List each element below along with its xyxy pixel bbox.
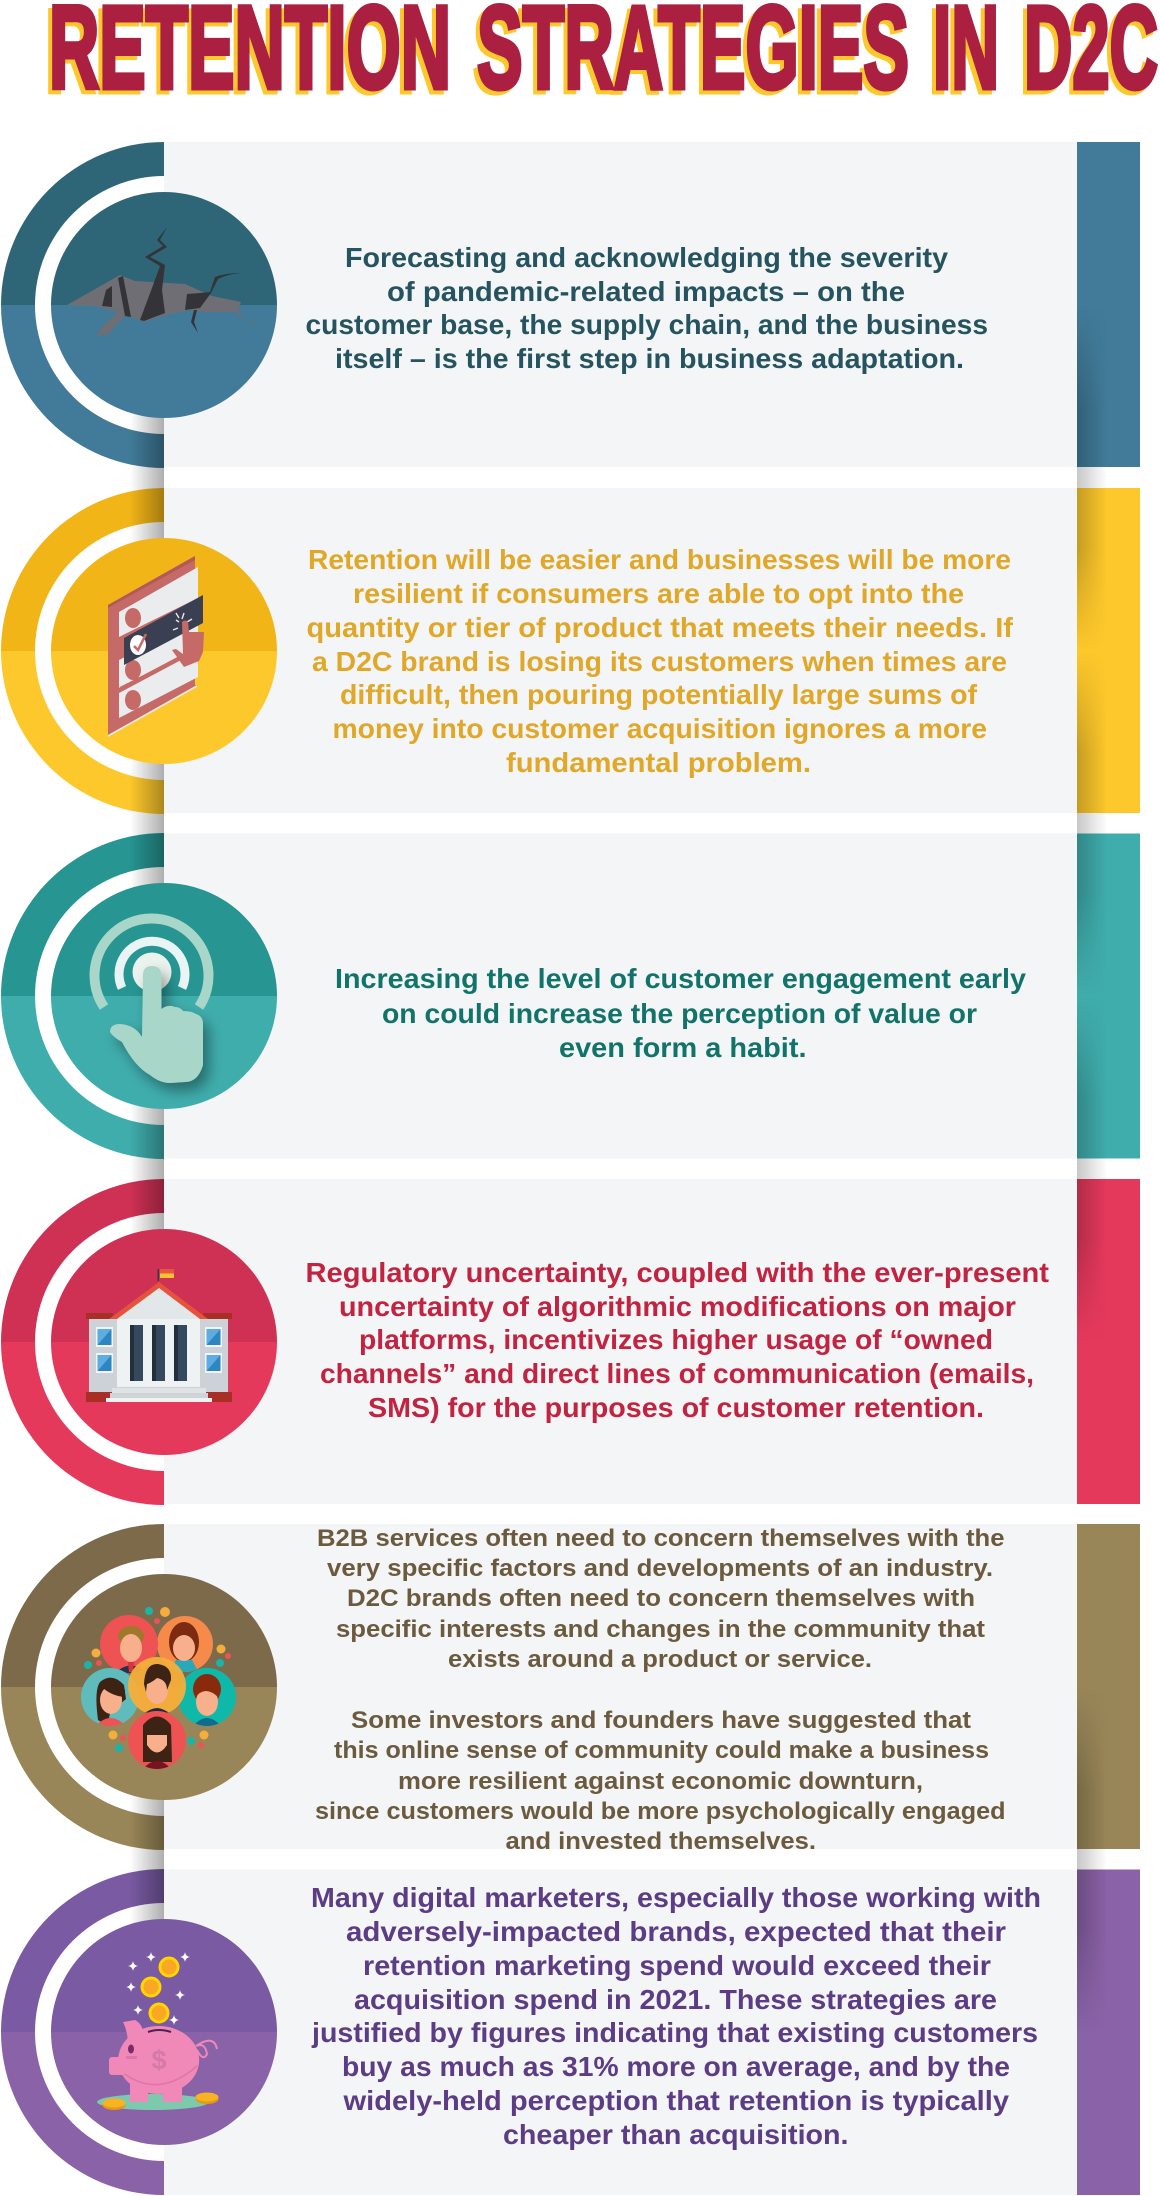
text: community: this online sense of community could make a business xyxy=(334,1737,989,1764)
text: product tiers xyxy=(306,544,1014,778)
text: community: specific interests and changes in the community that xyxy=(336,1616,985,1643)
panel: community xyxy=(1,1524,1140,1859)
text: forecasting: itself – is the first step in business adaptation. xyxy=(335,343,964,374)
text: forecasting xyxy=(306,242,988,374)
text: regulation xyxy=(306,1257,1049,1423)
text: community: Some investors and founders have suggested that xyxy=(351,1707,971,1734)
icon: piggy bank with coins: $ xyxy=(151,2045,167,2075)
panel: engagement xyxy=(1,823,1140,1169)
text: retention spend: adversely-impacted brands, expected that their xyxy=(346,1916,1006,1947)
text: retention spend: Many digital marketers, especially those working with xyxy=(311,1882,1041,1913)
icon: community avatars xyxy=(81,1607,236,1770)
text: engagement: Increasing the level of customer engagement early xyxy=(335,963,1027,994)
text: retention spend xyxy=(311,1882,1041,2150)
panel: forecasting xyxy=(1,142,1140,478)
text: product tiers: fundamental problem. xyxy=(506,747,811,778)
text: regulation: SMS) for the purposes of customer retention. xyxy=(368,1392,984,1423)
panel: product tiers xyxy=(1,478,1140,823)
text: community: more resilient against economic downturn, xyxy=(398,1768,923,1795)
text: retention spend: acquisition spend in 2021. These strategies are xyxy=(354,1984,997,2015)
text: engagement xyxy=(335,963,1027,1063)
text: retention spend: buy as much as 31% more on average, and by the xyxy=(342,2051,1010,2082)
text: product tiers: a D2C brand is losing its customers when times are xyxy=(312,646,1007,677)
text: regulation: uncertainty of algorithmic modifications on major xyxy=(339,1291,1016,1322)
text: community: very specific factors and developments of an industry. xyxy=(327,1555,993,1582)
text: retention spend: justified by figures indicating that existing customers xyxy=(311,2017,1038,2048)
title xyxy=(45,0,1158,118)
icon: piggy bank with coins xyxy=(97,1952,218,2110)
text: retention spend: widely-held perception that retention is typically xyxy=(342,2085,1010,2116)
text: forecasting: of pandemic-related impacts – on the xyxy=(387,276,905,307)
text: community: D2C brands often need to concern themselves with xyxy=(347,1585,975,1612)
text: engagement: even form a habit. xyxy=(559,1032,806,1063)
text: retention spend: retention marketing spend would exceed their xyxy=(363,1950,991,1981)
icon: cracked ground xyxy=(67,227,263,337)
text: forecasting: Forecasting and acknowledging the severity xyxy=(345,242,949,273)
text: product tiers: quantity or tier of product that meets their needs. If xyxy=(306,612,1014,643)
text: product tiers: resilient if consumers are able to opt into the xyxy=(353,578,964,609)
icon: institution building xyxy=(86,1269,232,1402)
text: regulation: channels” and direct lines of communication (emails, xyxy=(320,1358,1034,1389)
text: community: and invested themselves. xyxy=(506,1828,816,1855)
icon: checklist with pointing hand xyxy=(108,556,204,737)
text: product tiers: Retention will be easier and businesses will be more xyxy=(308,544,1011,575)
text: product tiers: difficult, then pouring potentially large sums of xyxy=(340,679,978,710)
text: engagement: on could increase the perception of value or xyxy=(382,998,977,1029)
text: community xyxy=(315,1525,1006,1855)
panel: regulation xyxy=(1,1169,1140,1505)
text: regulation: Regulatory uncertainty, coupled with the ever-present xyxy=(306,1257,1049,1288)
text: community: since customers would be more psychologically engaged xyxy=(315,1798,1006,1825)
text: product tiers: money into customer acquisition ignores a more xyxy=(332,713,987,744)
text: community: exists around a product or service. xyxy=(448,1646,872,1673)
text: retention spend: cheaper than acquisition. xyxy=(503,2119,848,2150)
text: regulation: platforms, incentivizes higher usage of “owned xyxy=(359,1324,993,1355)
text: community: B2B services often need to concern themselves with the xyxy=(317,1525,1004,1552)
icon: touch hand xyxy=(94,918,208,1083)
panel: retention spend xyxy=(1,1859,1140,2195)
text: forecasting: customer base, the supply chain, and the business xyxy=(306,309,988,340)
